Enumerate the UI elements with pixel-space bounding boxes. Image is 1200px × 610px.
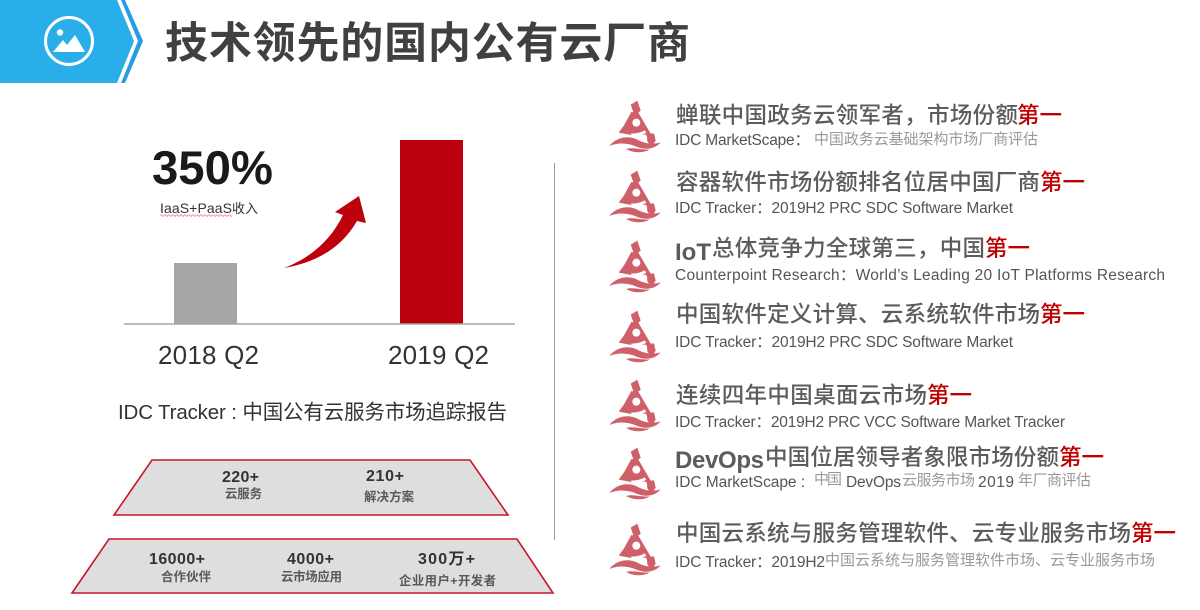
list item 5: 连续四年中国桌面云市场 xyxy=(676,383,927,408)
panel: upper trapezoid: 解决方案 xyxy=(364,489,415,504)
list item 1: 蝉联中国政务云领军者，市场份额 xyxy=(676,103,1018,128)
panel: lower trapezoid: 300万+ xyxy=(418,551,475,568)
list item 6: DevOps xyxy=(846,474,901,491)
list item 7 xyxy=(609,521,1176,575)
list item 6: 年厂商评估 xyxy=(1018,472,1091,489)
list item 7: IDC Tracker：2019H2 xyxy=(675,554,825,571)
list item 2: IDC Tracker：2019H2 PRC SDC Software Market xyxy=(675,200,1014,217)
panel: upper trapezoid: 云服务 xyxy=(225,486,263,501)
list item 7: 第一 xyxy=(1131,521,1176,546)
icon: image in circle xyxy=(46,18,92,64)
list item 1: 第一 xyxy=(1017,103,1062,128)
header banner xyxy=(0,0,143,83)
panel: lower trapezoid xyxy=(72,539,553,593)
list item 1 xyxy=(609,101,1062,152)
list item 6: 中国位居领导者象限市场份额 xyxy=(765,445,1059,470)
list item 6: 2019 xyxy=(978,474,1014,491)
list item 6: DevOps xyxy=(675,447,764,474)
panel: lower trapezoid: 4000+ xyxy=(287,551,334,568)
panel: lower trapezoid: 16000+ xyxy=(149,551,205,568)
list item 4: 中国软件定义计算、云系统软件市场 xyxy=(676,302,1040,327)
panel: lower trapezoid: 合作伙伴 xyxy=(161,569,212,584)
icon: kayak xyxy=(609,101,661,152)
list item 4: IDC Tracker：2019H2 PRC SDC Software Market xyxy=(675,334,1014,351)
list item 5: 第一 xyxy=(927,383,972,408)
icon: kayak xyxy=(609,171,661,222)
arrow: growth xyxy=(284,196,366,268)
growth callout xyxy=(152,141,273,216)
growth callout: 收入 xyxy=(232,201,258,216)
icon: kayak xyxy=(609,311,661,362)
list item 2: 容器软件市场份额排名位居中国厂商 xyxy=(676,170,1040,195)
list item 3: 总体竞争力全球第三，中国 xyxy=(712,236,985,261)
chart source: IDC Tracker : 中国公有云服务市场追踪报告 xyxy=(118,401,507,424)
divider xyxy=(554,163,556,540)
list item 2 xyxy=(609,170,1085,222)
list item 6 xyxy=(609,445,1104,499)
icon: kayak xyxy=(609,524,661,575)
list item 6: 第一 xyxy=(1059,445,1104,470)
list item 4 xyxy=(609,302,1085,362)
list item 6: 中国 xyxy=(814,471,842,488)
title: 技术领先的国内公有云厂商 xyxy=(165,20,690,68)
panel: lower trapezoid: 企业用户+开发者 xyxy=(399,573,496,588)
icon: kayak xyxy=(609,448,661,499)
list item 6: 云服务市场 xyxy=(902,472,975,489)
list item 3: 第一 xyxy=(985,236,1030,261)
list item 6: IDC MarketScape : xyxy=(675,474,805,491)
growth callout: 350% xyxy=(152,141,273,194)
icon: kayak xyxy=(609,380,661,431)
list item 1: 中国政务云基础架构市场厂商评估 xyxy=(814,131,1038,148)
panel: upper trapezoid: 220+ xyxy=(222,469,259,486)
list item 7: 中国云系统与服务管理软件市场、云专业服务市场 xyxy=(825,552,1155,569)
list item 5 xyxy=(609,380,1065,431)
list item 3: IoT xyxy=(675,239,711,266)
list item 5: IDC Tracker：2019H2 PRC VCC Software Market Tracker xyxy=(675,414,1065,431)
list item 4: 第一 xyxy=(1040,302,1085,327)
list item 7: 中国云系统与服务管理软件、云专业服务市场 xyxy=(676,521,1131,546)
icon: kayak xyxy=(609,241,661,292)
growth callout: IaaS+PaaS xyxy=(160,200,232,216)
bar chart: 2019 Q2 xyxy=(388,340,489,370)
bar chart xyxy=(124,140,515,370)
list item 3: Counterpoint Research：World’s Leading 20 IoT Platforms Research xyxy=(675,267,1165,284)
bar chart: 2018 Q2 xyxy=(158,340,259,370)
list item 3 xyxy=(609,236,1165,292)
panel: lower trapezoid: 云市场应用 xyxy=(281,569,342,584)
list item 1: IDC MarketScape： xyxy=(675,132,810,149)
list item 2: 第一 xyxy=(1040,170,1085,195)
panel: upper trapezoid: 210+ xyxy=(366,468,404,485)
panel: upper trapezoid xyxy=(114,460,508,515)
